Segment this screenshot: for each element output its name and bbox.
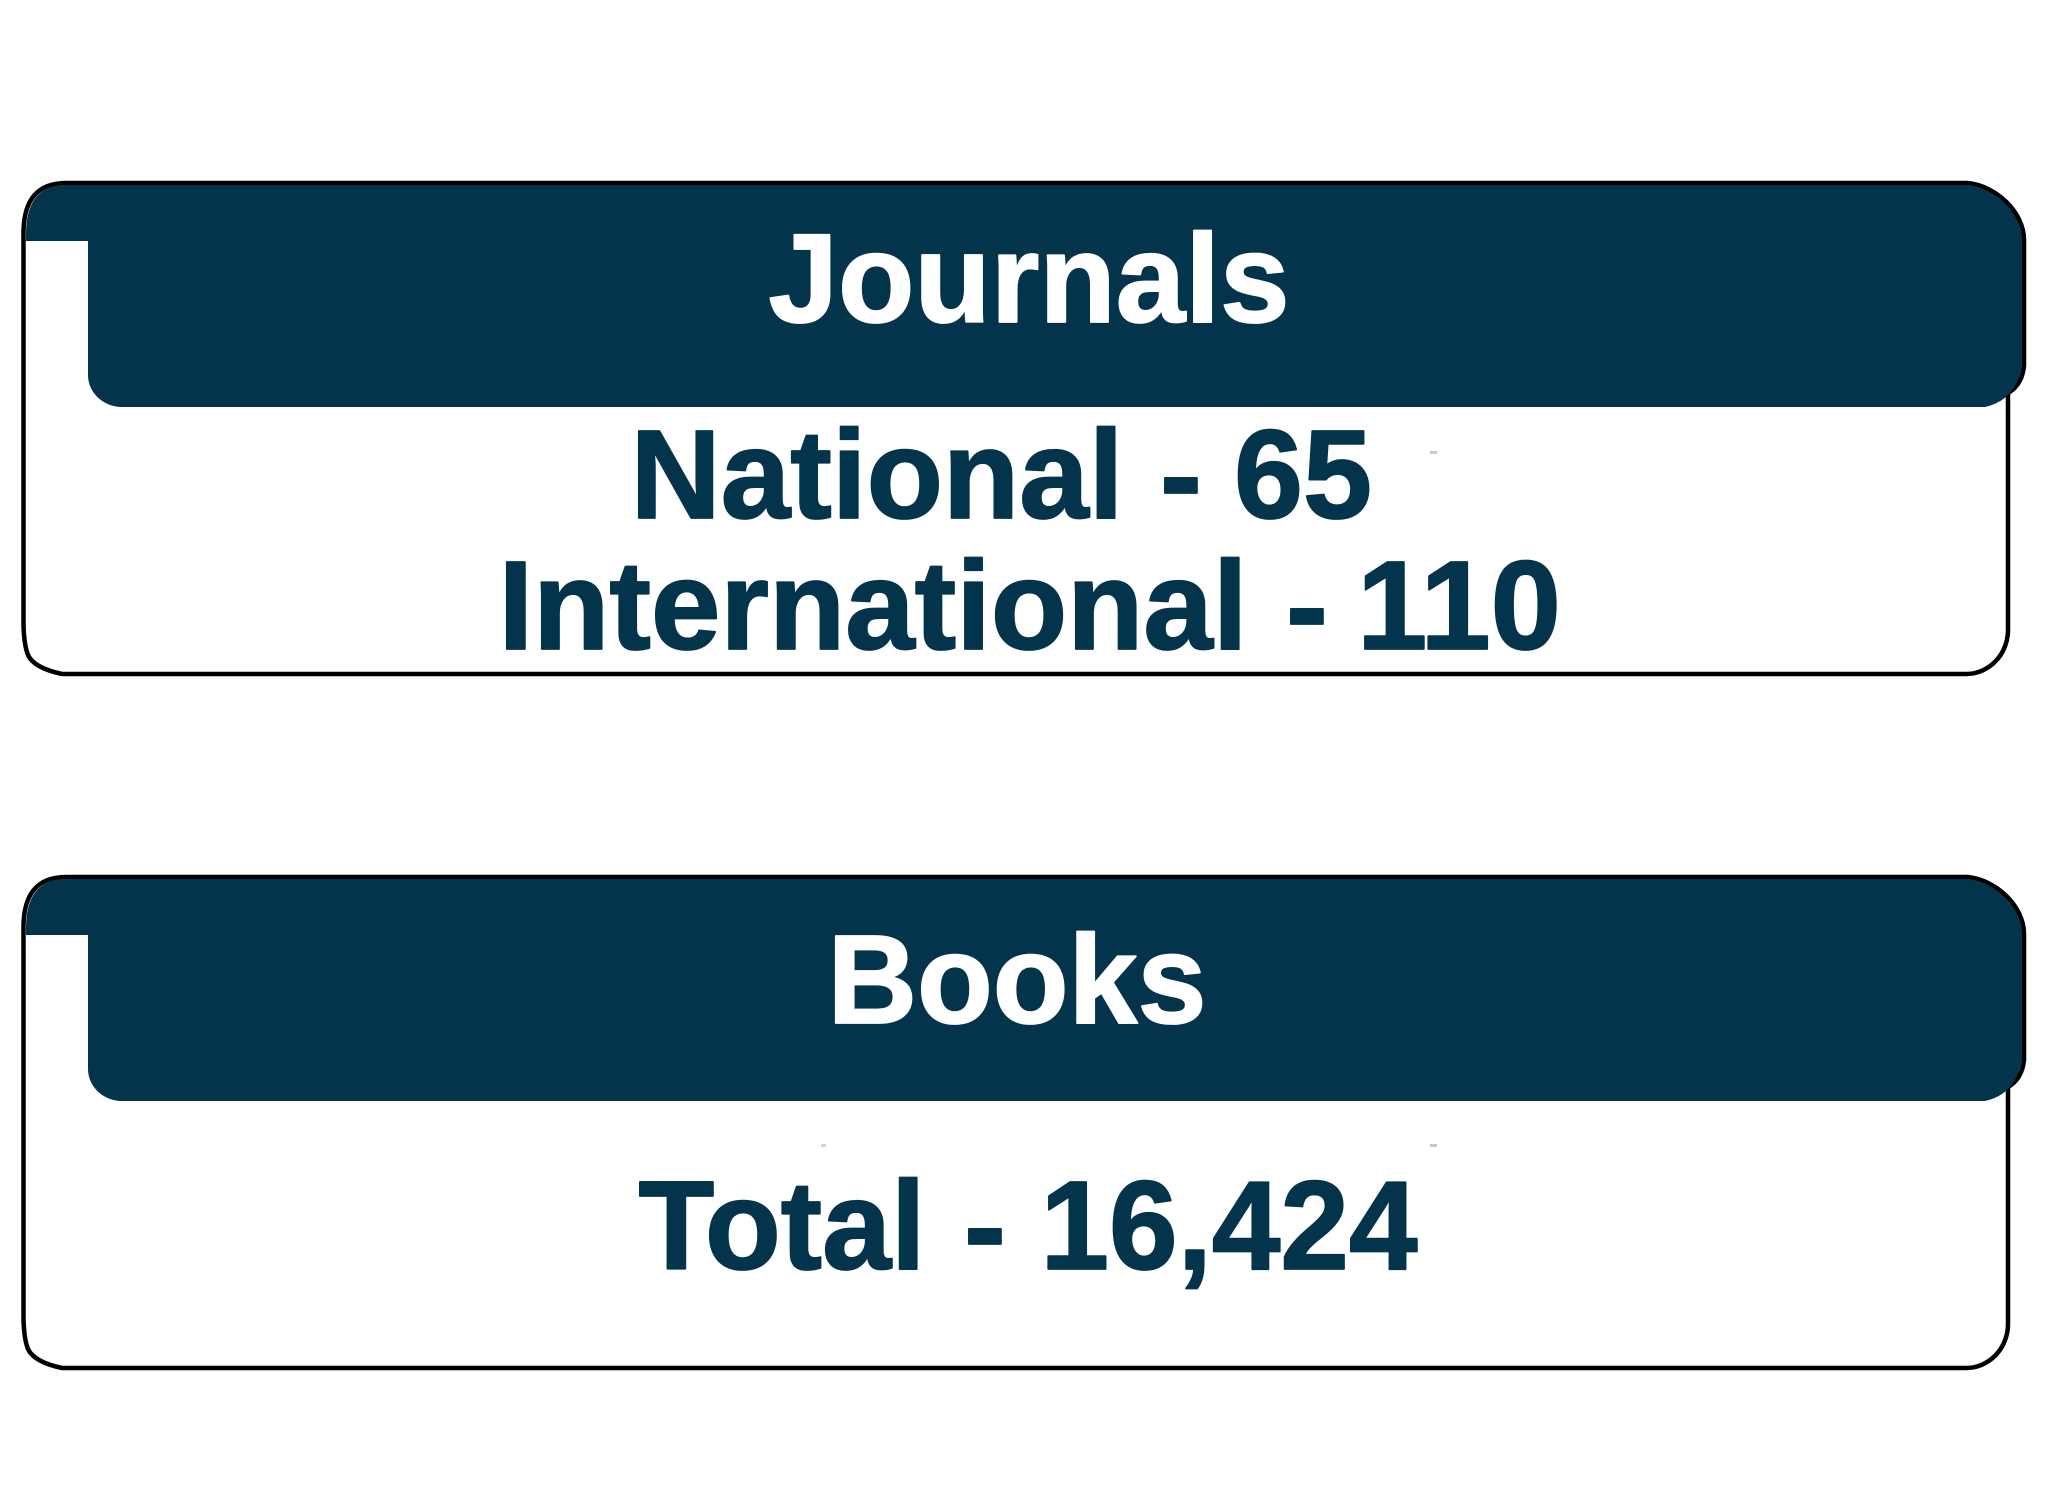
header band: journals bbox=[26, 185, 2022, 407]
text: International label: International bbox=[498, 535, 1248, 676]
heading: Journals: Journals bbox=[768, 208, 1290, 349]
panel outline: journals bbox=[24, 183, 2024, 674]
panel: books bbox=[24, 877, 2024, 1368]
text: National dash: - bbox=[1160, 404, 1202, 545]
panel outline: books bbox=[24, 877, 2024, 1368]
header band: books bbox=[26, 879, 2022, 1101]
panel: journals bbox=[24, 183, 2024, 676]
text: International count: 110 bbox=[1357, 535, 1561, 676]
text: National label: National bbox=[630, 404, 1124, 545]
text: International dash: - bbox=[1286, 535, 1328, 676]
heading: Books: Books bbox=[828, 909, 1206, 1050]
text: Total dash: - bbox=[964, 1155, 1006, 1296]
text: Total label: Total bbox=[638, 1155, 926, 1296]
text: National count: 65 bbox=[1234, 404, 1372, 545]
text: Total count: 16,424 bbox=[1040, 1155, 1418, 1296]
